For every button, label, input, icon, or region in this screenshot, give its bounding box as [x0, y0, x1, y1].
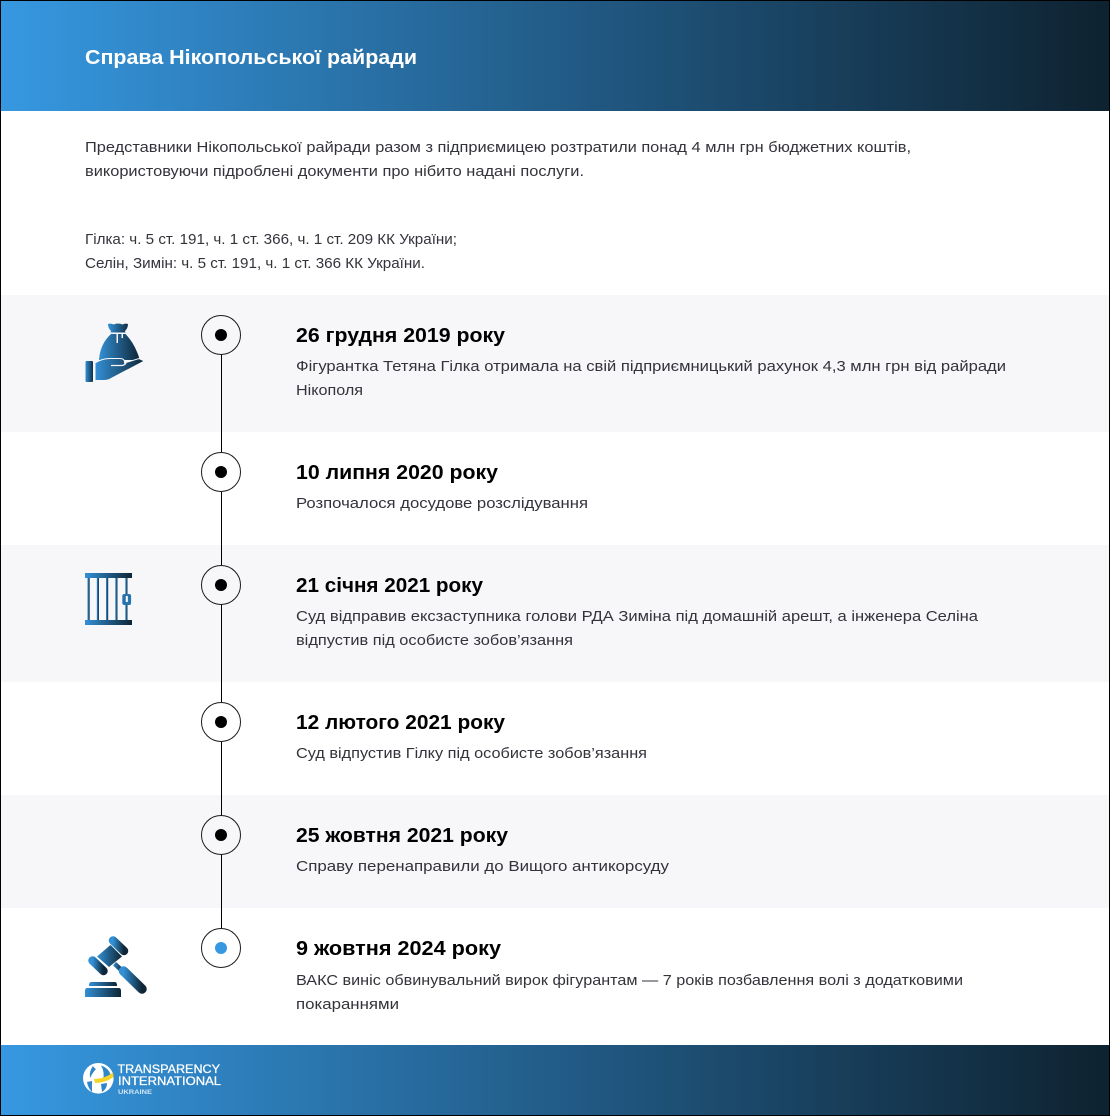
icon: money bag on hand [86, 324, 144, 382]
intro text: використовуючи підроблені документи про нібито надані послуги. [85, 163, 584, 180]
legal articles text: Гілка: ч. 5 ст. 191, ч. 1 ст. 366, ч. 1 ст. 209 КК України; [85, 231, 457, 248]
description: Розпочалося досудове розслідування [296, 495, 588, 512]
timeline node [202, 566, 240, 604]
legal articles text: Селін, Зимін: ч. 5 ст. 191, ч. 1 ст. 366 КК України. [85, 255, 425, 272]
logo emblem [83, 1063, 114, 1094]
description [296, 608, 979, 649]
description [296, 358, 1006, 399]
timeline node [202, 816, 240, 854]
intro text: Представники Нікопольської райради разом з підприємицею розтратили понад 4 млн грн бюджетних коштів, [85, 139, 911, 156]
description: Суд відправив ексзаступника голови РДА Зиміна під домашній арешт, а інженера Селіна [296, 608, 979, 625]
icon: judge gavel [85, 940, 142, 997]
logo: Transparency International Ukraine [83, 1063, 222, 1096]
description: покараннями [296, 996, 399, 1013]
header banner [0, 0, 1110, 111]
date heading: 10 липня 2020 року [296, 462, 499, 484]
logo wordmark: TRANSPARENCY [118, 1064, 220, 1076]
timeline node [202, 316, 240, 354]
background band: event 5 [0, 795, 1110, 908]
logo wordmark: INTERNATIONAL [118, 1076, 222, 1088]
footer banner [0, 1045, 1110, 1116]
event: 21 January 2021 [202, 566, 979, 649]
logo wordmark [118, 1064, 222, 1096]
timeline node [202, 452, 240, 492]
intro text [85, 139, 911, 180]
timeline line [220, 335, 222, 948]
event: 9 October 2024 [202, 928, 963, 1013]
description: Нікополя [296, 382, 363, 399]
description: Справу перенаправили до Вищого антикорсуду [296, 858, 670, 875]
date heading: 12 лютого 2021 року [296, 712, 506, 734]
timeline node [202, 702, 240, 742]
description: Суд відпустив Гілку під особисте зобов’язання [296, 745, 647, 762]
title: Справа Нікопольської райради [85, 47, 417, 69]
date heading: 21 січня 2021 року [296, 575, 484, 597]
timeline node [202, 928, 240, 968]
event: 12 February 2021 [202, 702, 647, 762]
description: ВАКС виніс обвинувальний вирок фігурантам — 7 років позбавлення волі з додатковими [296, 972, 963, 989]
description: Фігурантка Тетяна Гілка отримала на свій підприємницький рахунок 4,3 млн грн від райради [296, 358, 1006, 375]
date heading: 9 жовтня 2024 року [296, 938, 502, 960]
description [296, 972, 963, 1013]
background band: event 1 [0, 295, 1110, 432]
event: 26 December 2019 [202, 316, 1006, 399]
logo wordmark: UKRAINE [118, 1089, 153, 1096]
event: 10 July 2020 [202, 452, 588, 512]
event: 25 October 2021 [202, 816, 670, 875]
background band: event 3 [0, 545, 1110, 682]
date heading: 25 жовтня 2021 року [296, 825, 509, 847]
legal articles text [85, 231, 457, 272]
date heading: 26 грудня 2019 року [296, 325, 506, 347]
description: відпустив під особисте зобов’язання [296, 632, 573, 649]
icon: prison bars [85, 573, 132, 625]
